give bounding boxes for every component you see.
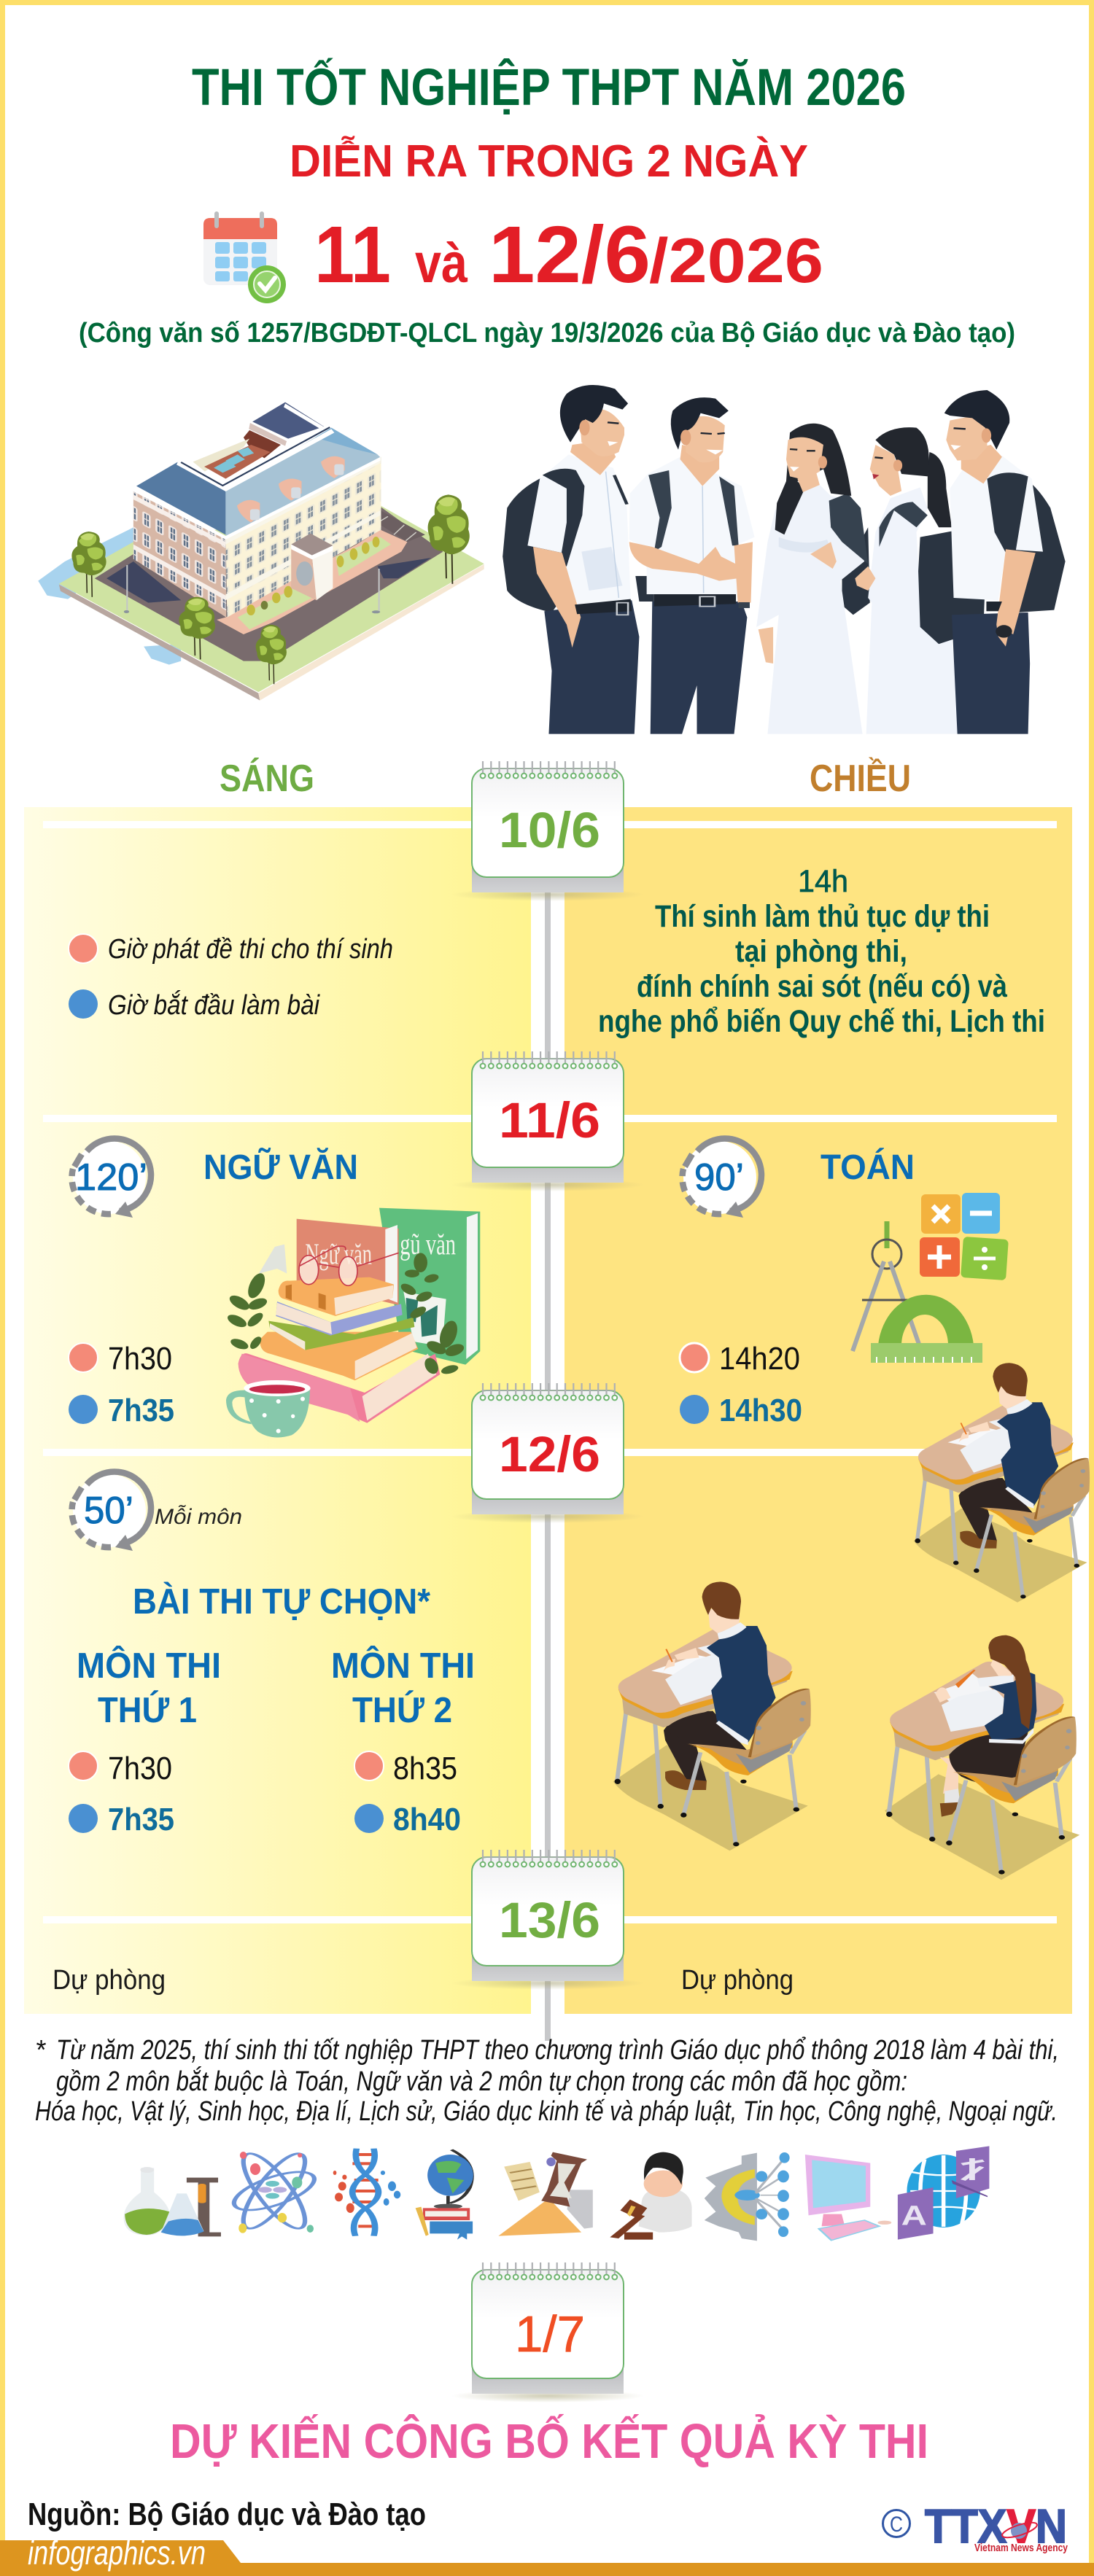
reserve day, afternoon: Dự phòng bbox=[681, 1965, 794, 1996]
elective subject 2: MÔN THI bbox=[331, 1646, 475, 1686]
elective subject 2: THỨ 2 bbox=[352, 1690, 452, 1730]
panel: afternoon column bbox=[565, 807, 1072, 2014]
calendar: 13/6 bbox=[451, 1850, 644, 1990]
icon: 50 minute timer: 50’ bbox=[84, 1490, 133, 1532]
icon: history bbox=[498, 2152, 593, 2236]
student 3 bbox=[756, 424, 870, 734]
footer band with site name bbox=[0, 2534, 1094, 2576]
times: maths bbox=[680, 1341, 802, 1428]
illustration: maths tools bbox=[853, 1193, 1009, 1363]
glasses bbox=[299, 1246, 399, 1285]
elective subject 2: 8h35 bbox=[393, 1751, 457, 1786]
icon: foreign languages bbox=[898, 2146, 989, 2240]
calendar: 13/6: 13/6 bbox=[499, 1892, 600, 1948]
icon: foreign languages: A bbox=[901, 2200, 927, 2231]
student 4 bbox=[855, 427, 985, 734]
times: maths: 14h20 bbox=[719, 1341, 800, 1377]
footnote bbox=[35, 2035, 1059, 2127]
legend bbox=[69, 934, 393, 1021]
reserve day, morning: Dự phòng bbox=[53, 1965, 166, 1996]
red textbook: Ngữ văn bbox=[305, 1237, 372, 1271]
elective subject 1: THỨ 1 bbox=[98, 1690, 197, 1730]
protractor and ruler bbox=[871, 1295, 982, 1363]
subject: maths: TOÁN bbox=[820, 1148, 915, 1187]
illustration: boy student at desk bbox=[613, 1581, 811, 1851]
stacked books bbox=[238, 1277, 440, 1423]
title line 1: THI TỐT NGHIỆP THPT NĂM 2026 bbox=[192, 58, 906, 117]
icon: 90 minute timer: 90’ bbox=[694, 1156, 744, 1199]
calendar: 1/7: 1/7 bbox=[515, 2305, 585, 2362]
exam dates bbox=[314, 210, 823, 300]
exam dates: và bbox=[415, 233, 468, 295]
subject: literature: NGỮ VĂN bbox=[203, 1147, 358, 1187]
calendar: 10/6: 10/6 bbox=[499, 802, 600, 858]
times: literature: 7h30 bbox=[108, 1341, 172, 1377]
text block: 10/6 afternoon procedure: 14h bbox=[798, 864, 848, 899]
icon: geography bbox=[416, 2149, 473, 2240]
compass bbox=[853, 1221, 921, 1351]
elective subject 1 bbox=[69, 1646, 221, 1837]
heading: results announcement: DỰ KIẾN CÔNG BỐ KẾT QUẢ KỲ THI bbox=[170, 2413, 928, 2469]
calendar: 1/7 bbox=[451, 2262, 644, 2402]
elective subject 2 bbox=[331, 1646, 475, 1837]
logo: TTXVN: Vietnam News Agency bbox=[974, 2542, 1068, 2554]
green textbook bbox=[379, 1208, 480, 1365]
subtitle: official document: (Công văn số 1257/BGDĐT-QLCL ngày 19/3/2026 của Bộ Giáo dục và Đào tạo) bbox=[79, 318, 1015, 349]
green textbook: gũ văn bbox=[400, 1228, 456, 1261]
timeline spine and day rules bbox=[43, 821, 1057, 2041]
red textbook bbox=[297, 1219, 399, 1305]
calendar: 12/6 bbox=[451, 1383, 644, 1523]
text block: 10/6 afternoon procedure: đính chính sai sót (nếu có) và bbox=[637, 969, 1008, 1004]
icon: technology bbox=[705, 2152, 790, 2241]
icon: law bbox=[610, 2152, 692, 2240]
source: Nguồn: Bộ Giáo dục và Đào tạo bbox=[28, 2497, 426, 2532]
exam dates: 12/6 bbox=[489, 210, 651, 300]
times: maths: 14h30 bbox=[719, 1393, 802, 1428]
icon: 120 minute timer: 120’ bbox=[75, 1156, 147, 1199]
icon: 50 minute timer bbox=[72, 1471, 151, 1551]
icon: computer bbox=[805, 2155, 891, 2241]
title line 2: DIỄN RA TRONG 2 NGÀY bbox=[290, 136, 808, 187]
icon: 120 minute timer bbox=[72, 1138, 151, 1218]
title bbox=[192, 58, 906, 187]
copyright mark: C bbox=[890, 2513, 903, 2537]
times: literature bbox=[69, 1341, 174, 1428]
text block: 10/6 afternoon procedure: tại phòng thi, bbox=[735, 934, 907, 969]
exam dates: /2026 bbox=[649, 226, 823, 296]
footer band with site name: infographics.vn bbox=[28, 2534, 206, 2572]
elective subject 1: MÔN THI bbox=[77, 1646, 221, 1686]
cup bbox=[226, 1380, 311, 1438]
caption: each subject: Mỗi môn bbox=[155, 1505, 242, 1529]
footnote: * bbox=[35, 2035, 46, 2066]
elective subject 1: 7h35 bbox=[108, 1802, 174, 1837]
copyright mark bbox=[882, 2510, 910, 2537]
text block: 10/6 afternoon procedure bbox=[598, 864, 1045, 1039]
illustration: books bbox=[225, 1208, 480, 1438]
elective subject 1: 7h30 bbox=[108, 1751, 172, 1786]
icon: physics bbox=[220, 2152, 329, 2233]
logo: TTXVN: TTXVN bbox=[925, 2499, 1067, 2553]
exam dates: 11 bbox=[314, 210, 391, 300]
icon: calendar with check bbox=[203, 214, 286, 303]
times: literature: 7h35 bbox=[108, 1393, 174, 1428]
calendar: 12/6: 12/6 bbox=[499, 1426, 600, 1482]
column heading: morning: SÁNG bbox=[220, 758, 314, 800]
icon: 90 minute timer bbox=[683, 1138, 761, 1218]
calendar: 11/6: 11/6 bbox=[499, 1092, 600, 1148]
operator blocks bbox=[920, 1193, 1009, 1280]
icon: chemistry bbox=[124, 2167, 221, 2236]
student 5 bbox=[944, 390, 1066, 734]
legend: Giờ phát đề thi cho thí sinh bbox=[108, 934, 393, 965]
text block: 10/6 afternoon procedure: Thí sinh làm thủ tục dự thi bbox=[655, 899, 990, 934]
illustration: boy student at desk, top right bbox=[914, 1363, 1090, 1603]
illustration: five students bbox=[503, 385, 1066, 734]
student 1 bbox=[503, 385, 639, 734]
calendar: 10/6 bbox=[451, 761, 644, 901]
footnote: gồm 2 môn bắt buộc là Toán, Ngữ văn và 2 môn tự chọn trong các môn đã học gồm: bbox=[56, 2066, 907, 2097]
legend: Giờ bắt đầu làm bài bbox=[108, 989, 320, 1021]
heading: elective exams: BÀI THI TỰ CHỌN* bbox=[133, 1582, 431, 1622]
leaves bbox=[225, 1253, 465, 1377]
icon: biology bbox=[333, 2149, 400, 2236]
illustration: school building bbox=[38, 402, 484, 701]
panel: morning column bbox=[24, 807, 531, 2014]
student 2 bbox=[629, 397, 755, 734]
subject icons row bbox=[124, 2146, 989, 2241]
calendar: 11/6 bbox=[451, 1051, 644, 1191]
elective subject 2: 8h40 bbox=[393, 1802, 461, 1837]
column heading: afternoon: CHIỀU bbox=[810, 757, 911, 800]
illustration: girl student at desk bbox=[885, 1635, 1079, 1880]
